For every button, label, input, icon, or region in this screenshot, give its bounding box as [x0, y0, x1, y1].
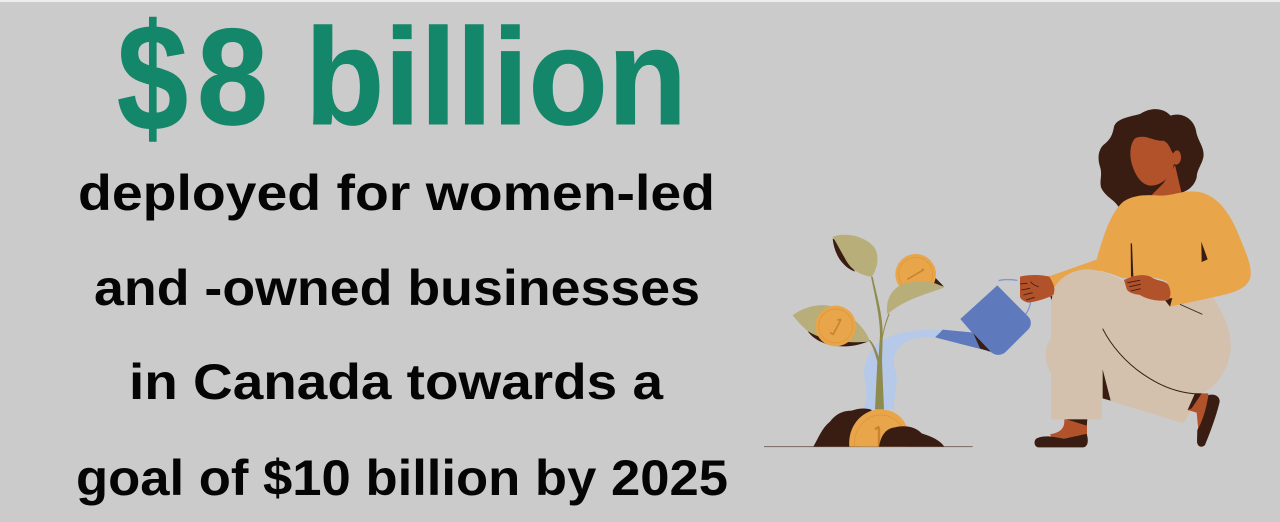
illustration: woman kneeling	[1020, 109, 1251, 447]
sweater	[1067, 191, 1251, 307]
watering can	[935, 280, 1031, 355]
hair	[1099, 109, 1204, 207]
plant stem	[868, 277, 890, 409]
hand on watering can	[1020, 275, 1054, 303]
back foot and shoe	[1188, 393, 1220, 447]
headline: $8 billion: 8	[197, 1, 268, 154]
trousers	[1046, 269, 1231, 423]
leaf: top	[833, 235, 877, 277]
leaf: right	[887, 281, 944, 314]
face	[1130, 137, 1181, 186]
left arm back	[1048, 259, 1100, 288]
soil mound: right	[879, 426, 944, 447]
headline: $8 billion	[117, 0, 687, 163]
coin: left	[815, 306, 856, 346]
clothing fold lines	[1050, 242, 1208, 401]
text block: description: in Canada towards a	[129, 354, 664, 410]
coin: in soil	[849, 409, 907, 447]
can shadow	[973, 333, 991, 352]
hand on knee	[1124, 275, 1170, 301]
text block: description: goal of $10 billion by 2025	[76, 450, 728, 506]
text block: description: and -owned businesses	[94, 260, 700, 316]
coin: top right	[895, 254, 944, 295]
leaf: left	[793, 305, 870, 346]
text block: description	[76, 165, 728, 506]
text block: description: deployed for women-led	[78, 165, 715, 221]
water stream	[863, 330, 942, 409]
headline: $8 billion: billion	[305, 1, 687, 154]
ground line	[764, 445, 973, 448]
illustration: plant with coins and watering can	[764, 235, 1031, 447]
front foot and shoe	[1035, 419, 1088, 447]
soil mound: left	[813, 409, 872, 447]
neck	[1152, 165, 1182, 198]
